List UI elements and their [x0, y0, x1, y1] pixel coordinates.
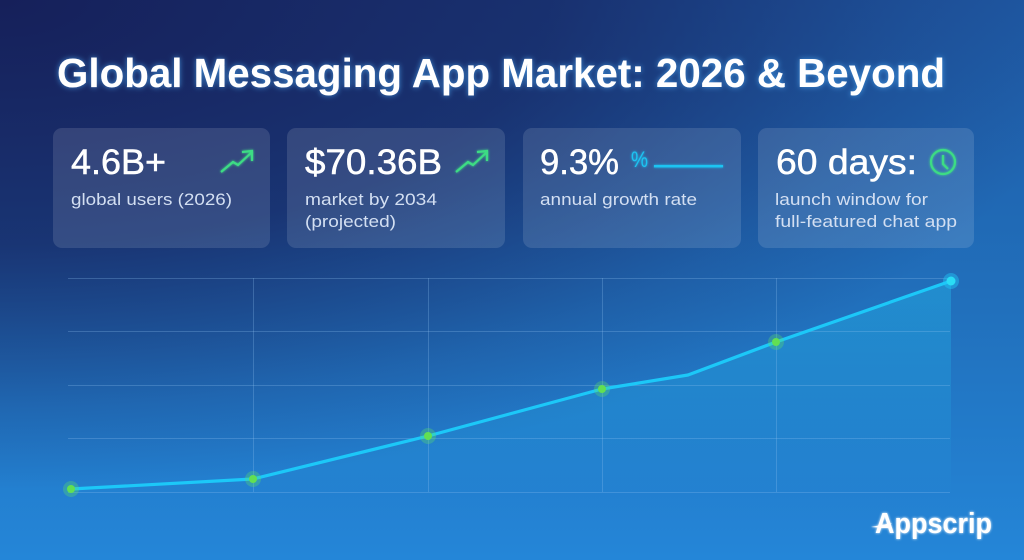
panel: global users	[53, 128, 270, 248]
trend line	[71, 281, 951, 489]
icon: green trend arrow	[221, 151, 252, 172]
label: projected: (projected)	[305, 212, 396, 231]
stat: 9.3%: 9.3%	[540, 143, 619, 182]
label: global users: global users (2026)	[71, 190, 232, 209]
label: launch window for: launch window for	[775, 190, 928, 209]
label: annual growth rate: annual growth rate	[540, 190, 697, 209]
panel: launch window	[758, 128, 974, 248]
title: Global Messaging App Market: 2026 & Beyond	[57, 50, 945, 96]
stat: 4.6B+: 4.6B+	[71, 143, 166, 182]
icon: percent with line	[631, 147, 723, 172]
logo: Appscrip: Appscrip	[875, 508, 992, 540]
panel: market size	[287, 128, 505, 248]
label: market by 2034: market by 2034	[305, 190, 437, 209]
icon: green clock	[931, 150, 955, 174]
chart area fill	[71, 281, 951, 492]
icon: percent with line: %	[631, 147, 648, 172]
grid lines	[68, 278, 950, 492]
label: full-featured chat app: full-featured chat app	[775, 212, 957, 231]
data points	[63, 273, 959, 497]
line chart	[63, 273, 959, 497]
stat: $70.36B: $70.36B	[305, 143, 442, 182]
icon: green trend arrow	[456, 151, 487, 172]
panel: growth rate	[523, 128, 741, 248]
stat: 60 days: 60 days:	[776, 143, 917, 182]
